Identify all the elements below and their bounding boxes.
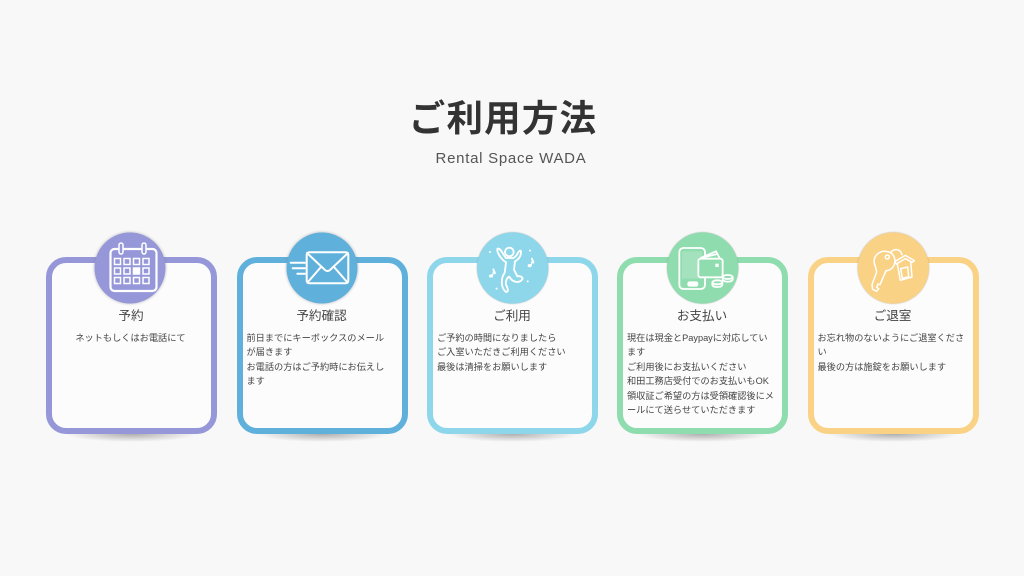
- body text: [246, 333, 384, 386]
- card frame: [236, 257, 408, 434]
- heading: お支払い: [677, 309, 727, 323]
- panel: 予約確認: [237, 231, 408, 441]
- card frame: [427, 257, 598, 434]
- card shadow: [637, 434, 768, 442]
- heading: 予約: [118, 309, 144, 323]
- icon: envelope: [285, 231, 359, 305]
- heading: ご退室: [874, 309, 911, 323]
- subtitle: Rental Space WADA: [436, 150, 586, 167]
- panel: お支払い: [617, 232, 788, 441]
- icon: calendar: [93, 231, 167, 305]
- body text: ます: [627, 347, 645, 357]
- body text: 最後は清掃をお願いします: [437, 362, 547, 372]
- icon: key and house: [856, 232, 930, 304]
- card shadow: [256, 434, 388, 442]
- card frame: [808, 257, 978, 434]
- panel: ご退室: [808, 232, 979, 441]
- card frame: [46, 257, 217, 434]
- card frame: [617, 257, 788, 434]
- panel: 予約: [46, 231, 217, 441]
- body text: 最後の方は施錠をお願いします: [818, 362, 946, 372]
- body text: 現在は現金とPaypayに対応してい: [627, 333, 768, 343]
- card shadow: [828, 434, 958, 442]
- body text: い: [818, 347, 827, 357]
- body text: [437, 333, 566, 372]
- title: ご利用方法: [409, 98, 597, 139]
- body text: ールにて送らせていただきます: [627, 405, 755, 415]
- body text: お忘れ物のないようにご退室くださ: [818, 333, 964, 343]
- heading: ご利用: [493, 309, 531, 323]
- icon: dancing person: [476, 232, 549, 304]
- body text: [627, 333, 774, 415]
- body text: ネットもしくはお電話にて: [75, 333, 186, 343]
- body text: 前日までにキーボックスのメール: [246, 333, 384, 343]
- body text: ご利用後にお支払いください: [627, 362, 746, 372]
- heading: 予約確認: [296, 309, 347, 323]
- body text: 和田工務店受付でのお支払いもOK: [627, 376, 769, 386]
- body text: [818, 333, 964, 372]
- body text: ご入室いただきご利用ください: [437, 347, 566, 357]
- body text: 領収証ご希望の方は受領確認後にメ: [627, 391, 774, 401]
- panel: ご利用: [427, 232, 598, 441]
- body text: が届きます: [246, 347, 292, 357]
- body text: ます: [246, 376, 265, 386]
- body text: ご予約の時間になりましたら: [437, 333, 556, 343]
- card shadow: [447, 434, 578, 442]
- card shadow: [66, 434, 197, 442]
- body text: お電話の方はご予約時にお伝えし: [246, 362, 384, 372]
- icon: phone and wallet: [666, 232, 739, 304]
